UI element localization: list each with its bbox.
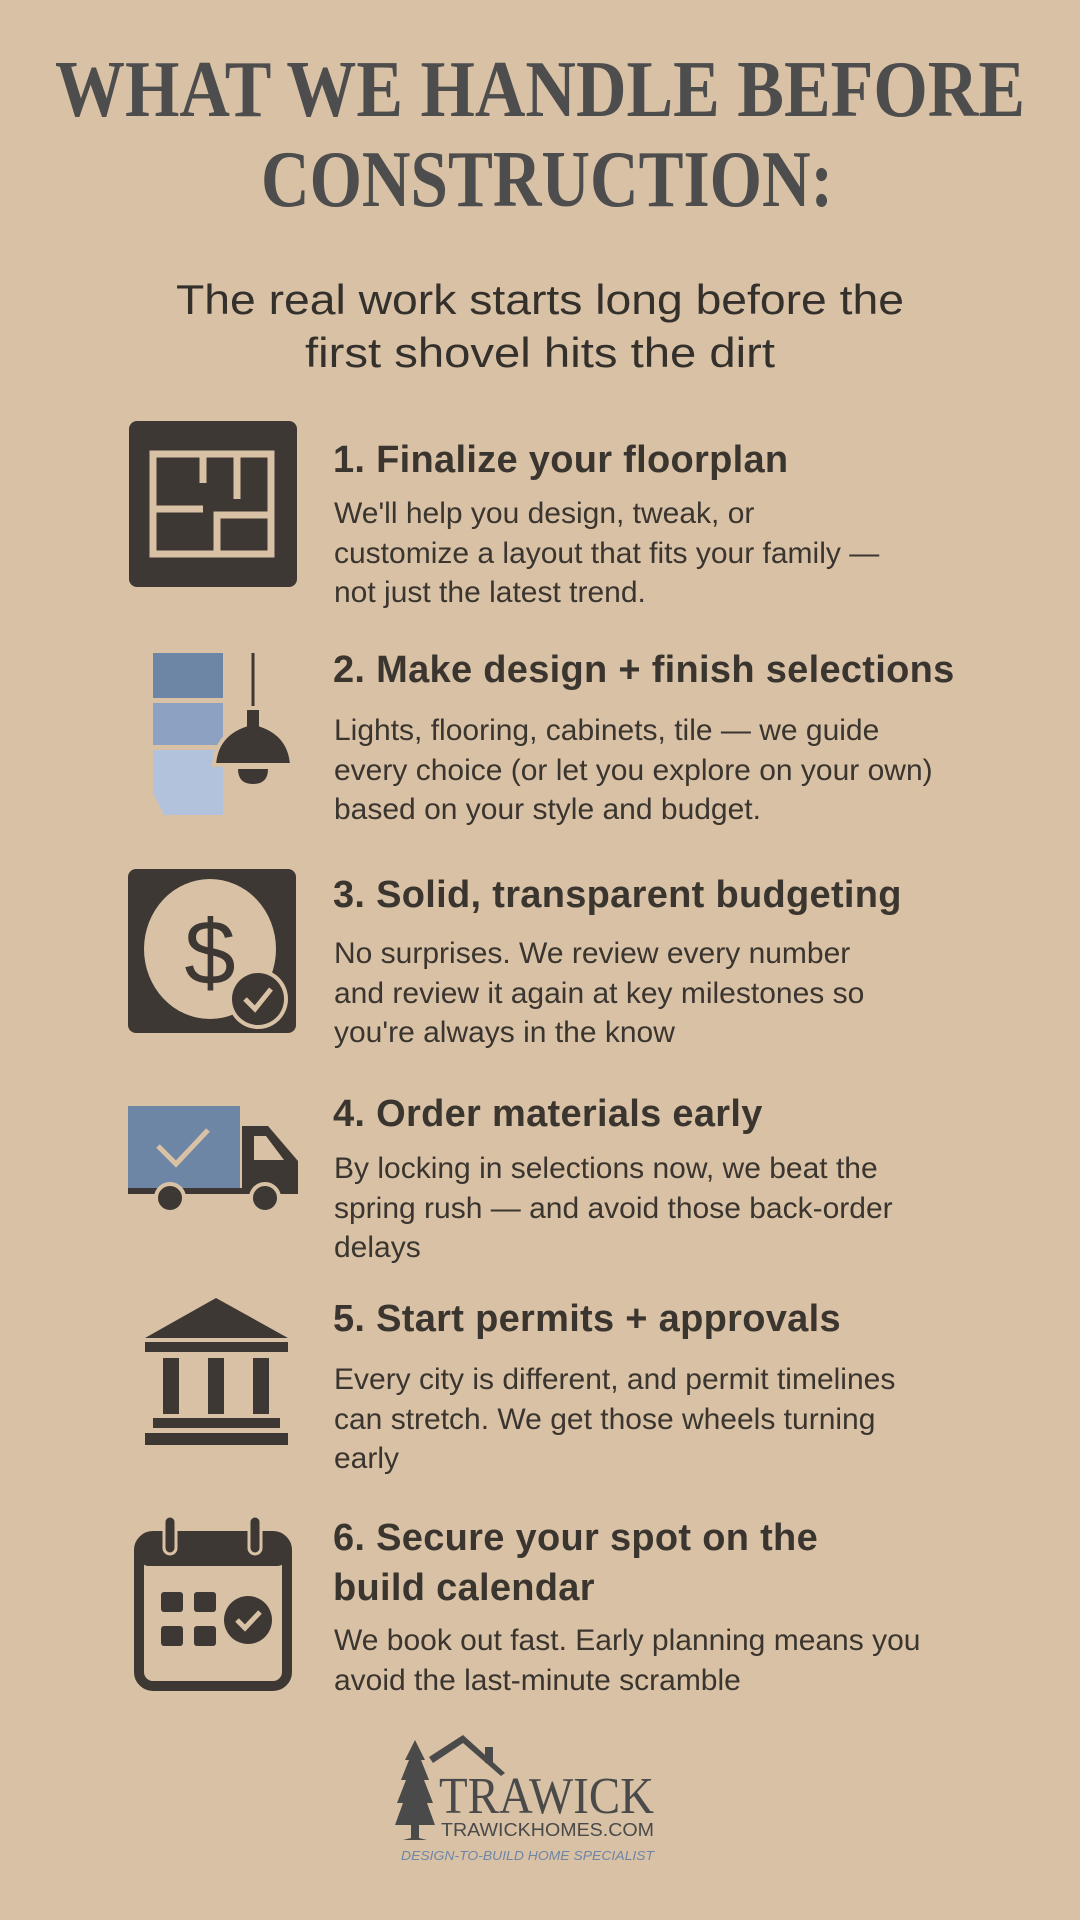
body 3: and review it again at key milestones so [334,976,864,1010]
icon: calendar [134,1518,292,1691]
icon: government building [145,1298,288,1445]
subtitle [176,276,904,376]
body 2 [334,714,933,826]
body 1: customize a layout that fits your family — [334,536,879,570]
body 1 [334,497,880,609]
icon: swatches and lamp [153,653,290,815]
body 1: We'll help you design, tweak, or [334,497,754,530]
heading 6: build calendar [333,1567,595,1609]
body 2: every choice (or let you explore on your own) [334,754,933,786]
heading 6 [333,1517,818,1609]
icon: truck [128,1106,298,1210]
heading 3: 3. Solid, transparent budgeting [333,874,902,916]
logo: DESIGN-TO-BUILD HOME SPECIALIST [401,1848,655,1863]
body 2: based on your style and budget. [334,793,761,826]
body 5: early [334,1442,399,1475]
logo: TRAWICKHOMES.COM [441,1820,654,1840]
body 4: By locking in selections now, we beat the [334,1152,878,1185]
heading 4: 4. Order materials early [333,1093,763,1135]
body 2: Lights, flooring, cabinets, tile — we guide [334,714,879,747]
body 4 [334,1152,893,1264]
title: CONSTRUCTION: [261,136,833,224]
body 6: avoid the last-minute scramble [334,1664,741,1696]
body 1: not just the latest trend. [334,576,646,609]
body 3: No surprises. We review every number [334,937,850,970]
icon: floorplan [129,421,297,587]
body 3: you're always in the know [334,1016,675,1049]
body 5 [334,1363,895,1475]
subtitle: The real work starts long before the [176,276,904,323]
title [55,46,1025,224]
body 3 [334,937,864,1049]
logo [395,1735,655,1863]
icon: budget [128,869,296,1033]
body 6: We book out fast. Early planning means you [334,1624,920,1657]
heading 2: 2. Make design + finish selections [333,649,955,691]
body 5: can stretch. We get those wheels turning [334,1402,875,1436]
body 5: Every city is different, and permit timelines [334,1363,895,1396]
logo: TRAWICK [439,1768,654,1825]
subtitle: first shovel hits the dirt [305,329,775,376]
heading 5: 5. Start permits + approvals [333,1298,841,1340]
body 4: delays [334,1231,421,1264]
heading 1: 1. Finalize your floorplan [333,439,788,481]
icon: budget: $ [184,902,236,1004]
body 4: spring rush — and avoid those back-order [334,1192,893,1224]
body 6 [334,1624,920,1696]
heading 6: 6. Secure your spot on the [333,1517,818,1559]
